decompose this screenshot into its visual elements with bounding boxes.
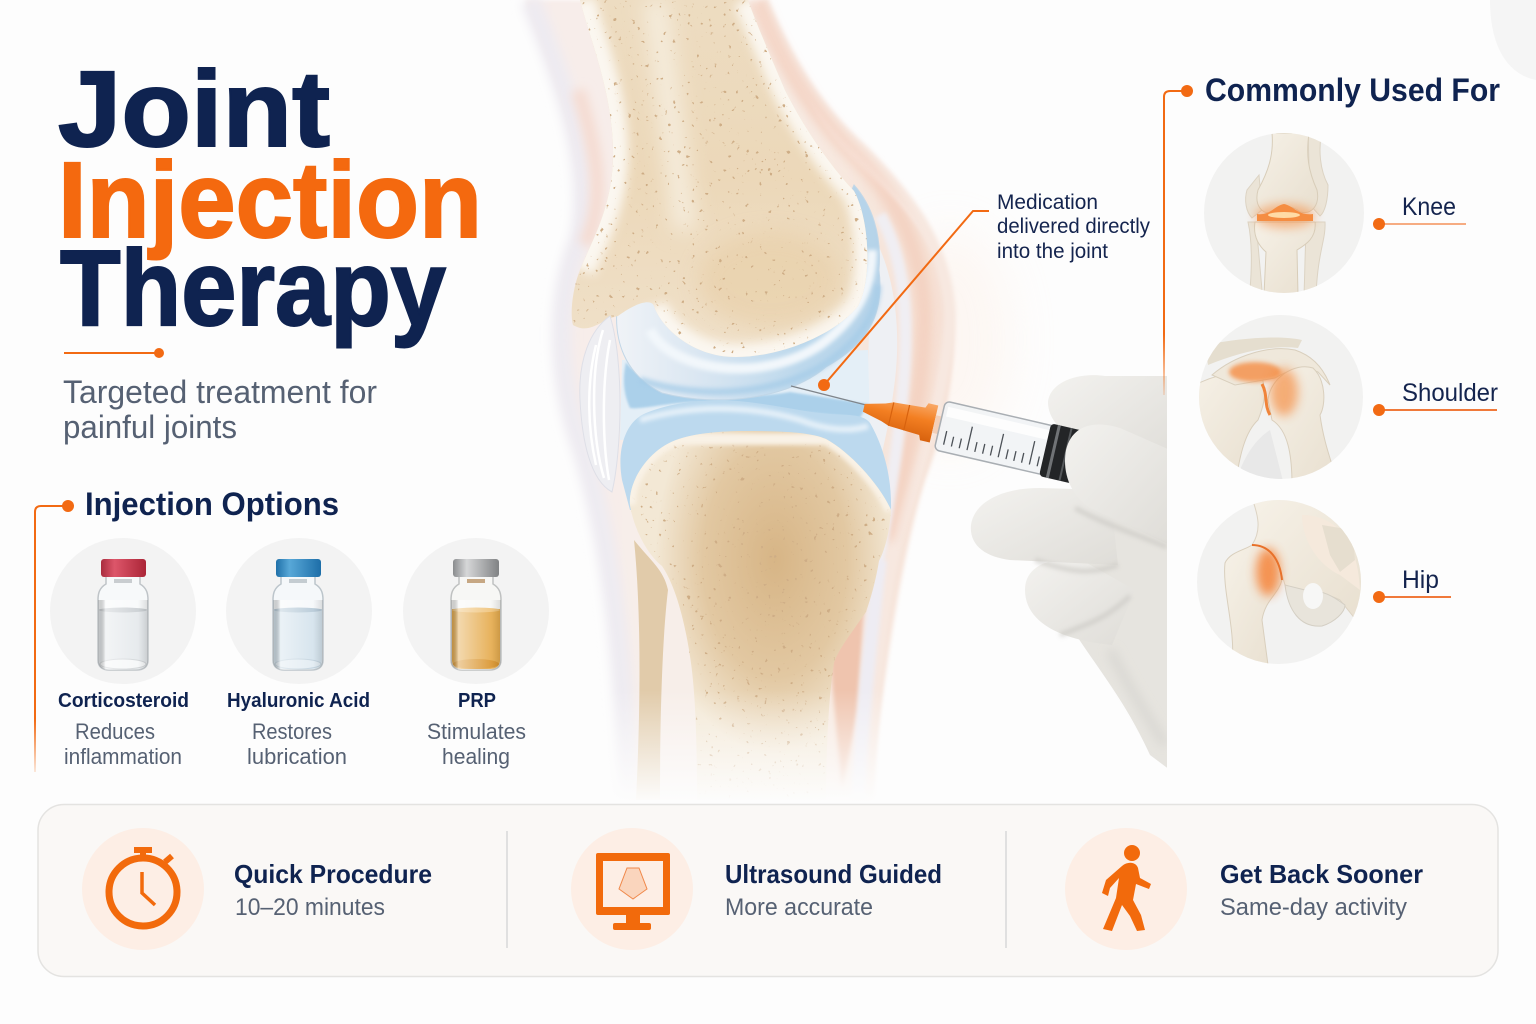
option: corticosteroid: Corticosteroid <box>58 689 189 712</box>
bottom panel <box>38 804 1498 976</box>
heading: injection options: Injection Options <box>85 486 339 522</box>
femoral cartilage <box>617 185 880 400</box>
option: corticosteroid <box>50 538 196 769</box>
use: hip <box>1197 498 1451 665</box>
icon: knee joint <box>1246 130 1328 295</box>
soft tissue around the knee <box>525 0 953 800</box>
subtitle: Targeted treatment for <box>63 374 377 410</box>
callout: medication delivered <box>818 190 1150 391</box>
title underline <box>64 348 164 358</box>
use: shoulder <box>1190 315 1498 485</box>
callout: medication delivered: into the joint <box>997 239 1108 263</box>
right side ligament <box>866 230 897 470</box>
subtitle: painful joints <box>63 409 237 445</box>
patellar ligament <box>580 316 620 492</box>
syringe <box>791 381 1084 484</box>
title <box>58 48 482 348</box>
icon: amber vial <box>451 559 501 670</box>
option: PRP <box>403 538 549 769</box>
use: knee <box>1204 130 1466 295</box>
bottom fade <box>510 690 950 804</box>
feature: get back sooner <box>1065 828 1423 950</box>
knee anatomy illustration <box>510 0 953 804</box>
icon: blue vial <box>273 559 323 670</box>
icon: stopwatch <box>109 847 177 926</box>
option: hyaluronic acid: Restores <box>252 719 332 744</box>
option: PRP: healing <box>442 744 510 769</box>
feature: quick procedure: 10–20 minutes <box>235 894 385 921</box>
icon: shoulder joint <box>1199 338 1332 479</box>
title: Joint <box>58 48 330 169</box>
heading: commonly used for <box>1164 72 1500 395</box>
option: hyaluronic acid: lubrication <box>247 744 347 769</box>
feature: quick procedure <box>82 828 432 950</box>
needle <box>791 386 866 405</box>
feature: ultrasound guided: More accurate <box>725 894 873 921</box>
use: knee: Knee <box>1402 193 1456 221</box>
feature: quick procedure: Quick Procedure <box>234 859 432 889</box>
barrel <box>934 401 1058 476</box>
icon: walking person <box>1102 845 1151 931</box>
option: PRP: Stimulates <box>427 719 526 744</box>
femur <box>560 0 880 360</box>
icon: ultrasound monitor <box>596 853 670 930</box>
orange hub <box>860 389 938 443</box>
title: Therapy <box>60 227 446 348</box>
callout: medication delivered: delivered directly <box>997 214 1150 238</box>
subtitle <box>63 374 377 445</box>
thumb over syringe <box>1065 424 1170 547</box>
heading: commonly used for: Commonly Used For <box>1205 72 1500 108</box>
option: hyaluronic acid <box>226 538 372 769</box>
icon: clear vial <box>98 559 148 670</box>
fibula <box>634 540 668 800</box>
option: hyaluronic acid: Hyaluronic Acid <box>227 689 370 712</box>
heading: injection options <box>35 486 339 772</box>
callout: medication delivered: Medication <box>997 190 1098 214</box>
feature: get back sooner: Same-day activity <box>1220 894 1407 921</box>
feature: ultrasound guided: Ultrasound Guided <box>725 859 942 889</box>
gloved hand <box>971 375 1170 770</box>
icon: hip joint <box>1225 498 1365 665</box>
feature: get back sooner: Get Back Sooner <box>1220 859 1423 889</box>
feature: ultrasound guided <box>571 828 942 950</box>
option: corticosteroid: inflammation <box>64 744 182 769</box>
option: PRP: PRP <box>458 689 496 712</box>
title: Injection <box>58 139 482 260</box>
tibia <box>620 425 900 800</box>
blue shade in joint space <box>620 350 870 440</box>
option: corticosteroid: Reduces <box>75 719 155 744</box>
use: shoulder: Shoulder <box>1402 379 1498 407</box>
tibial cartilage <box>620 400 891 510</box>
use: hip: Hip <box>1402 566 1439 594</box>
